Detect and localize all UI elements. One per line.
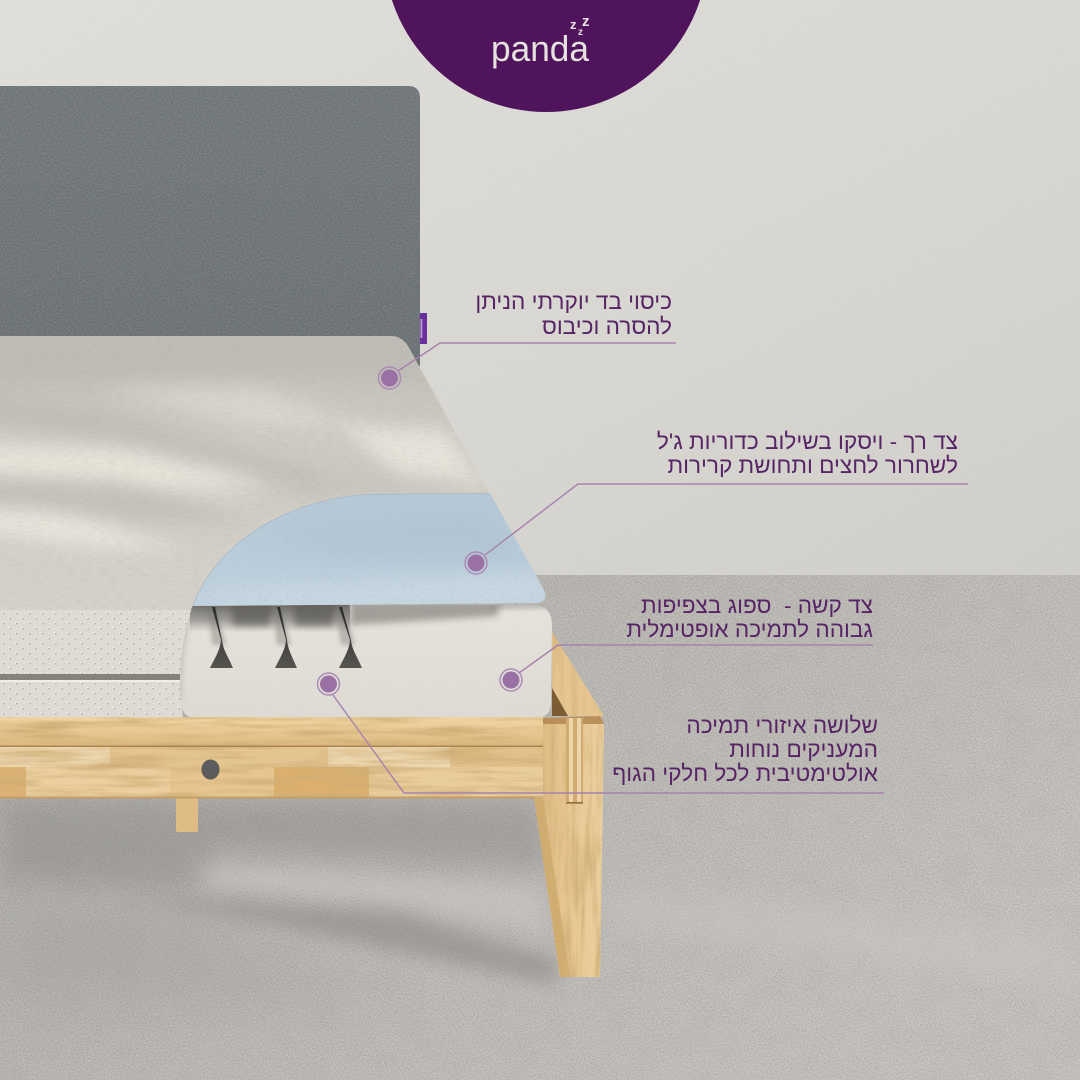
- callout text: soft side: [657, 429, 958, 478]
- darker upper zone: [0, 350, 412, 380]
- purple fabric tag: [420, 313, 427, 344]
- zipper seam: [0, 674, 180, 680]
- floor shadow under bed: [0, 800, 555, 890]
- logo sleep letters: [570, 13, 590, 38]
- bolt: [202, 760, 220, 780]
- left edge shade: [180, 614, 190, 701]
- floor light patch: [210, 865, 545, 930]
- mattress top cover: [0, 330, 495, 616]
- callout text: support zones: המעניקים נוחות: [729, 737, 878, 762]
- logo sleep letters: z: [578, 27, 583, 38]
- logo sleep letters: z: [570, 17, 577, 32]
- bed frame: [0, 632, 606, 978]
- callout text: cover: להסרה וכיבוס: [542, 314, 672, 339]
- callout lines: [333, 343, 968, 793]
- dark cushion tops: [231, 606, 272, 626]
- callout text: support zones: [612, 713, 878, 786]
- marker: gel layer: [465, 552, 487, 574]
- callout text: soft side: לשחרור לחצים ותחושת קרירות: [667, 453, 958, 478]
- marker: support zones: [318, 673, 340, 695]
- headboard: [0, 86, 421, 368]
- soft shade near the grooves: [208, 607, 226, 645]
- callout text: support zones: שלושה איזורי תמיכה: [686, 713, 878, 738]
- wall background: [0, 0, 1080, 576]
- support zone grooves: [210, 607, 362, 668]
- light streaks: [146, 387, 330, 427]
- foam base layer: [174, 600, 560, 718]
- callout text: firm side: גבוהה לתמיכה אופטימלית: [626, 617, 873, 642]
- blue gel memory foam layer: [190, 490, 552, 608]
- floor: [0, 575, 1080, 1080]
- callout text: soft side: צד רך - ויסקו בשילוב כדוריות ג'ל: [657, 429, 958, 454]
- logo sleep letters: z: [582, 13, 590, 30]
- lower rail: [0, 747, 544, 798]
- far side rail: [552, 632, 604, 717]
- logo wordmark: panda: [491, 28, 590, 69]
- marker: firm side: [500, 669, 522, 691]
- marker: cover: [378, 367, 400, 389]
- mattress side band: [0, 610, 192, 717]
- callout text: cover: [475, 289, 672, 339]
- callout text: support zones: אולטימטיבית לכל חלקי הגוף: [612, 761, 878, 786]
- leg and post: [530, 716, 606, 978]
- logo badge: [384, 0, 708, 112]
- back foot: [176, 796, 198, 832]
- floor diagonal shadow: [130, 897, 560, 985]
- callout text: firm side: צד קשה - ספוג בצפיפות: [641, 593, 873, 618]
- shadow cast under the gel layer: [190, 605, 350, 632]
- callout text: cover: כיסוי בד יוקרתי הניתן: [475, 289, 672, 314]
- callout text: firm side: [626, 593, 873, 642]
- top rail: [0, 717, 544, 748]
